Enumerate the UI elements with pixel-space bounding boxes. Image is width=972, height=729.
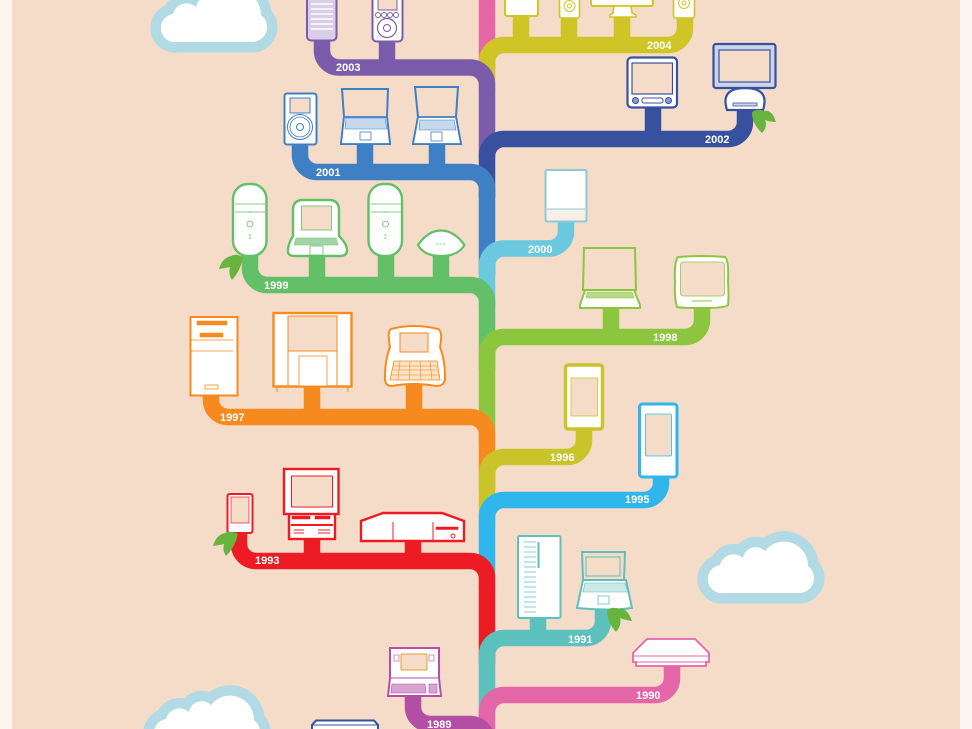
device: Newton handheld (566, 365, 602, 429)
device: PowerBook laptop (577, 552, 632, 610)
year label 1990: 1990 (636, 690, 660, 702)
year label 2001: 2001 (316, 167, 340, 179)
connector 2001 (300, 143, 487, 275)
device: Macintosh Portable (388, 648, 441, 696)
year label 2000: 2000 (528, 244, 552, 256)
year label 1996: 1996 (550, 452, 574, 464)
device: bottom console (cropped) (312, 720, 378, 729)
device: eMate clamshell (385, 326, 445, 386)
branch: 1989 (388, 648, 487, 729)
connector 1998 (487, 305, 702, 445)
cloud: middle right (708, 542, 814, 593)
device: Twentieth Anniversary Mac (274, 313, 352, 392)
branch: 2001 (284, 87, 487, 275)
device: set-top console (361, 513, 464, 541)
branch: 2000 (487, 170, 586, 308)
connector 1991 (487, 608, 603, 720)
device: Power Mac G4 tower 2 (368, 184, 402, 256)
leaf 1999 (219, 255, 243, 280)
device: AirPort base station (418, 230, 464, 256)
connector 1993 (239, 531, 487, 664)
device: iPod (284, 94, 316, 144)
device: left speaker (560, 0, 580, 18)
branch: 1998 (487, 248, 728, 445)
branch: 1997 (190, 313, 487, 490)
device: display cube (505, 0, 538, 16)
device: Pippin handheld (640, 404, 677, 477)
branch: 2004 (487, 0, 694, 92)
year label 1993: 1993 (255, 555, 279, 567)
branch: 1991 (487, 536, 632, 720)
year label 1999: 1999 (264, 280, 288, 292)
trunk: top pink segment (479, 0, 495, 70)
branch: 2003 (307, 0, 487, 158)
year label 2003: 2003 (336, 62, 360, 74)
branch: 1993 (213, 469, 487, 664)
device: iBook clamshell (288, 200, 347, 256)
connector 1997 (211, 385, 487, 490)
connector 1995 (487, 476, 661, 590)
device: iBook laptop (413, 87, 461, 144)
connector 1999 (250, 254, 487, 370)
cloud: top left (161, 0, 267, 42)
device: iMac G4 (714, 44, 776, 110)
connector 2000 (487, 220, 566, 308)
device: eMac (628, 58, 677, 108)
device: PowerBook laptop (580, 248, 640, 308)
year label 1998: 1998 (653, 332, 677, 344)
device: Power Mac G4 tower (233, 184, 266, 256)
branch: 2002 (487, 44, 776, 198)
device: tower (190, 317, 238, 396)
device: slot display (546, 170, 586, 222)
leaf 1991 (607, 608, 632, 632)
year label 2004: 2004 (647, 40, 672, 52)
branch: 1999 (219, 184, 487, 370)
year label 1995: 1995 (625, 494, 649, 506)
branch: 1995 (487, 404, 677, 590)
connector 1996 (487, 428, 584, 530)
connector 1989 (413, 695, 487, 729)
device: pizza box Mac (633, 639, 709, 666)
device: Macintosh with monitor (284, 469, 338, 539)
device: flat panel iMac (591, 0, 653, 17)
leaf 1993 (213, 532, 238, 556)
branch: 1990 (487, 639, 709, 729)
connector 2004 (487, 14, 685, 92)
device: right speaker (674, 0, 694, 18)
year label 2002: 2002 (705, 134, 729, 146)
device: tower (307, 0, 336, 40)
year label 1997: 1997 (220, 412, 244, 424)
device: Quadra tower (518, 536, 560, 618)
connector 2003 (322, 38, 487, 158)
connector 2002 (487, 105, 745, 198)
cloud: bottom left (154, 696, 260, 729)
leaf 2002 (752, 110, 776, 133)
device: iPod with buttons (372, 0, 402, 42)
connector 1990 (487, 665, 672, 729)
device: iMac G3 (675, 256, 728, 308)
branch: 1996 (487, 365, 602, 530)
device: titanium laptop (341, 89, 390, 144)
year label 1991: 1991 (568, 634, 592, 646)
device: MessagePad (228, 494, 252, 533)
